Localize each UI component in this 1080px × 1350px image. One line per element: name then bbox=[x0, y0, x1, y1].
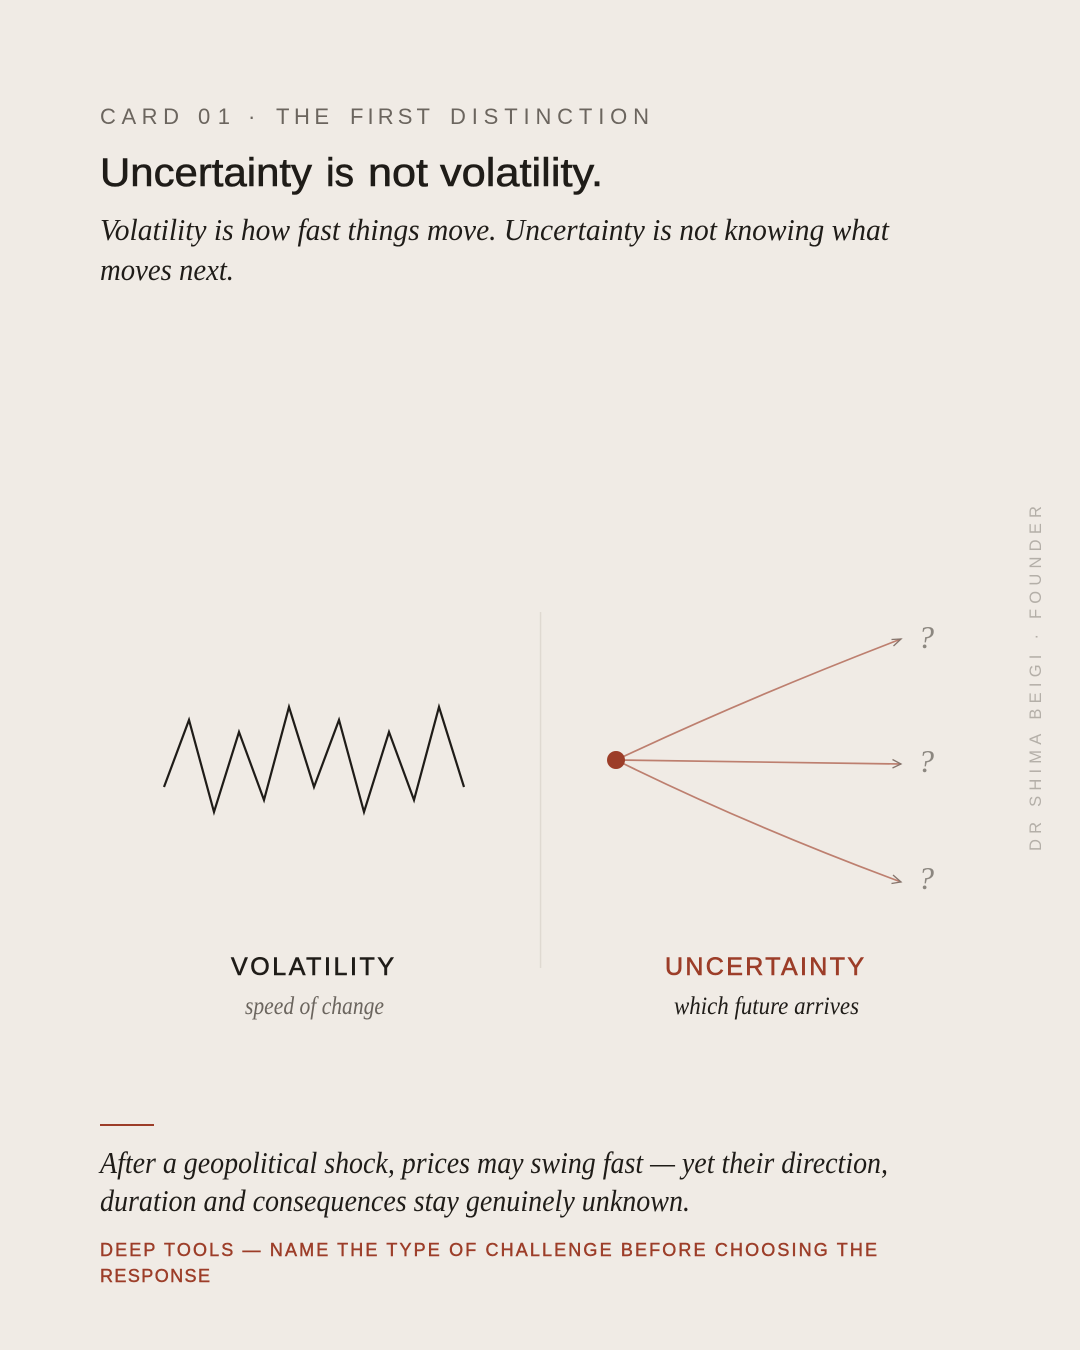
kicker: THE bbox=[276, 104, 329, 129]
question marks: ? bbox=[918, 743, 934, 779]
quote: After a geopolitical shock, prices may swing fast — yet their direction, bbox=[98, 1145, 888, 1180]
quote: duration and consequences stay genuinely unknown. bbox=[100, 1183, 690, 1218]
origin dot bbox=[607, 751, 625, 769]
arrow: middle future bbox=[616, 760, 901, 768]
accent rule bbox=[100, 1124, 154, 1126]
caption: uncertainty: which future arrives bbox=[674, 993, 859, 1020]
kicker: 01 bbox=[198, 104, 230, 129]
arrow: lower future bbox=[616, 760, 901, 884]
question marks bbox=[918, 619, 934, 896]
title: is bbox=[326, 151, 354, 195]
chart: uncertainty branching arrows bbox=[607, 619, 934, 896]
label: volatility: VOLATILITY bbox=[231, 953, 394, 981]
kicker bbox=[100, 104, 649, 129]
question marks: ? bbox=[918, 619, 934, 655]
takeaway: DEEP TOOLS — NAME THE TYPE OF CHALLENGE BEFORE CHOOSING THE bbox=[100, 1240, 877, 1260]
title: Uncertainty bbox=[100, 151, 312, 195]
title: not bbox=[368, 151, 428, 195]
label: uncertainty: UNCERTAINTY bbox=[665, 953, 864, 981]
arrow: upper future bbox=[616, 639, 901, 760]
subtitle: moves next. bbox=[100, 252, 234, 287]
kicker: CARD bbox=[100, 104, 179, 129]
takeaway bbox=[100, 1240, 877, 1286]
side credit: DR SHIMA BEIGI · FOUNDER bbox=[1027, 506, 1045, 851]
takeaway: RESPONSE bbox=[100, 1266, 210, 1286]
question marks: ? bbox=[918, 860, 934, 896]
kicker: DISTINCTION bbox=[450, 104, 649, 129]
subtitle bbox=[100, 212, 890, 287]
kicker: · bbox=[248, 104, 255, 129]
subtitle: Volatility is how fast things move. Uncertainty is not knowing what bbox=[100, 212, 890, 247]
quote bbox=[98, 1145, 888, 1218]
caption: volatility: speed of change bbox=[245, 993, 384, 1020]
chart: volatility zigzag bbox=[164, 707, 464, 812]
kicker: FIRST bbox=[350, 104, 430, 129]
title bbox=[100, 151, 603, 195]
divider bbox=[540, 612, 541, 968]
title: volatility. bbox=[440, 151, 603, 195]
